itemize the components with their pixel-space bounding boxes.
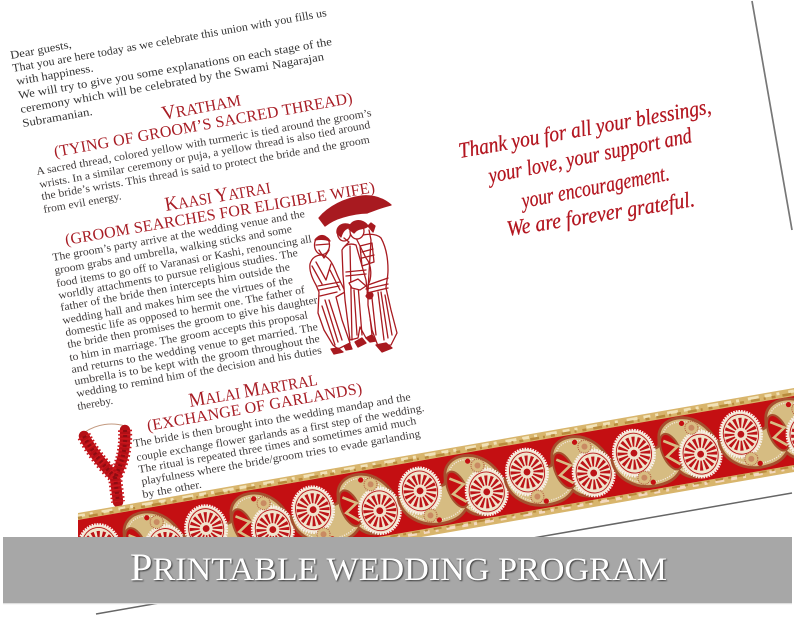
text: thank you message: Thank you for all your blessings, <box>456 93 713 163</box>
text: Vratham description: wrists. In a similar ceremony or puja, a yellow thread is also tied around <box>38 119 372 191</box>
text: Kaasi Yatrai description: to him in marriage. The groom accepts this proposal <box>68 309 309 364</box>
heading: Malai Martral: MALAI MARTRAL <box>187 368 319 412</box>
panel: ceremony explanations <box>9 7 425 501</box>
text: Malai Martral description: playfulness where the bride/groom tries to evade garlanding <box>140 428 422 488</box>
text: Malai Martral description: The ritual is repeated three times and sometimes amid much <box>137 415 418 476</box>
text: Malai Martral description: The bride is then brought into the wedding mandap and the <box>132 391 412 450</box>
text: Kaasi Yatrai description: and returns to the wedding venue to get married. The <box>70 321 319 376</box>
text: Vratham description: the bride’s wrists. This thread is said to protect the bride and the groom <box>40 134 371 203</box>
intro text: Dear guests, <box>9 39 73 62</box>
text: thank you message <box>456 93 713 241</box>
text: Kaasi Yatrai description: umbrella is to be kept with the groom throughout the <box>73 333 321 388</box>
text: Kaasi Yatrai description: food items to go off to Varanasi or Kashi, renouncing all <box>55 233 313 290</box>
text: thank you message: your love, your support and <box>484 122 695 188</box>
text: Kaasi Yatrai description: wedding hall and makes him see the virtues of the <box>61 274 294 327</box>
text: Malai Martral description: couple exchange flower garlands as a first step of the wedding. <box>135 402 425 464</box>
heading: Malai Martral: (EXCHANGE OF GARLANDS) <box>146 380 363 435</box>
figure: priest with walking stick <box>349 221 397 352</box>
heading: Vratham: (TYING OF GROOM’S SACRED THREAD) <box>53 90 354 161</box>
intro text: Subramanian. <box>21 106 94 130</box>
text: thank you message: your encouragement. <box>518 160 671 213</box>
figure: old man <box>310 236 352 354</box>
intro text: We will try to give you some explanations on each stage of the <box>17 36 333 102</box>
intro text: That you are here today as we celebrate this union with you fills us <box>11 7 328 75</box>
text: Kaasi Yatrai description <box>51 208 323 413</box>
decorative paisley band <box>78 388 794 537</box>
text: Kaasi Yatrai description: thereby. <box>76 395 114 413</box>
text: thank you message: We are forever grateful. <box>505 186 696 241</box>
intro text: with happiness. <box>15 63 94 88</box>
text: Kaasi Yatrai description: groom grabs and umbrella, walking sticks and some <box>53 223 293 277</box>
paper edge: right side <box>752 1 792 230</box>
text: Malai Martral description <box>132 391 425 501</box>
text: Vratham description: A sacred thread, colored yellow with turmeric is tied around the groom’s <box>35 107 372 178</box>
text: Kaasi Yatrai description: domestic life as opposed to hermit one. The father of <box>64 284 306 339</box>
icon: umbrella <box>319 196 391 226</box>
intro text <box>9 7 333 130</box>
text: Kaasi Yatrai description: the bride then promises the groom to give his daughter <box>66 294 319 351</box>
paper edge: bottom side <box>96 493 792 614</box>
heading: Vratham: VRATHAM <box>160 88 243 125</box>
title: PRINTABLE WEDDING PROGRAM <box>130 546 667 589</box>
text: Malai Martral description: by the other. <box>141 479 203 501</box>
text: Kaasi Yatrai description: The groom’s party arrive at the wedding venue and the <box>51 208 306 264</box>
banner: gray title bar <box>3 537 792 604</box>
text: Vratham description: from evil energy. <box>42 190 123 216</box>
heading: Kaasi Yatrai: KAASI YATRAI <box>163 176 272 216</box>
heading: Kaasi Yatrai: (GROOM SEARCHES FOR ELIGIBLE WIFE) <box>64 179 376 249</box>
text: Kaasi Yatrai description: worldly attachments to pursue religious studies. The <box>57 247 299 302</box>
text: Kaasi Yatrai description: father of the bride then intercepts him outside the <box>59 261 291 314</box>
illustration: groom with umbrella and father of the bride <box>310 196 397 354</box>
text: Vratham description <box>35 107 372 216</box>
figure: groom <box>337 224 376 347</box>
icon: flower garland <box>84 424 125 502</box>
intro text: ceremony which will be celebrated by the Swami Nagarajan <box>19 51 325 116</box>
text: Kaasi Yatrai description: wedding to remind him of the decision and his duties <box>75 344 323 400</box>
